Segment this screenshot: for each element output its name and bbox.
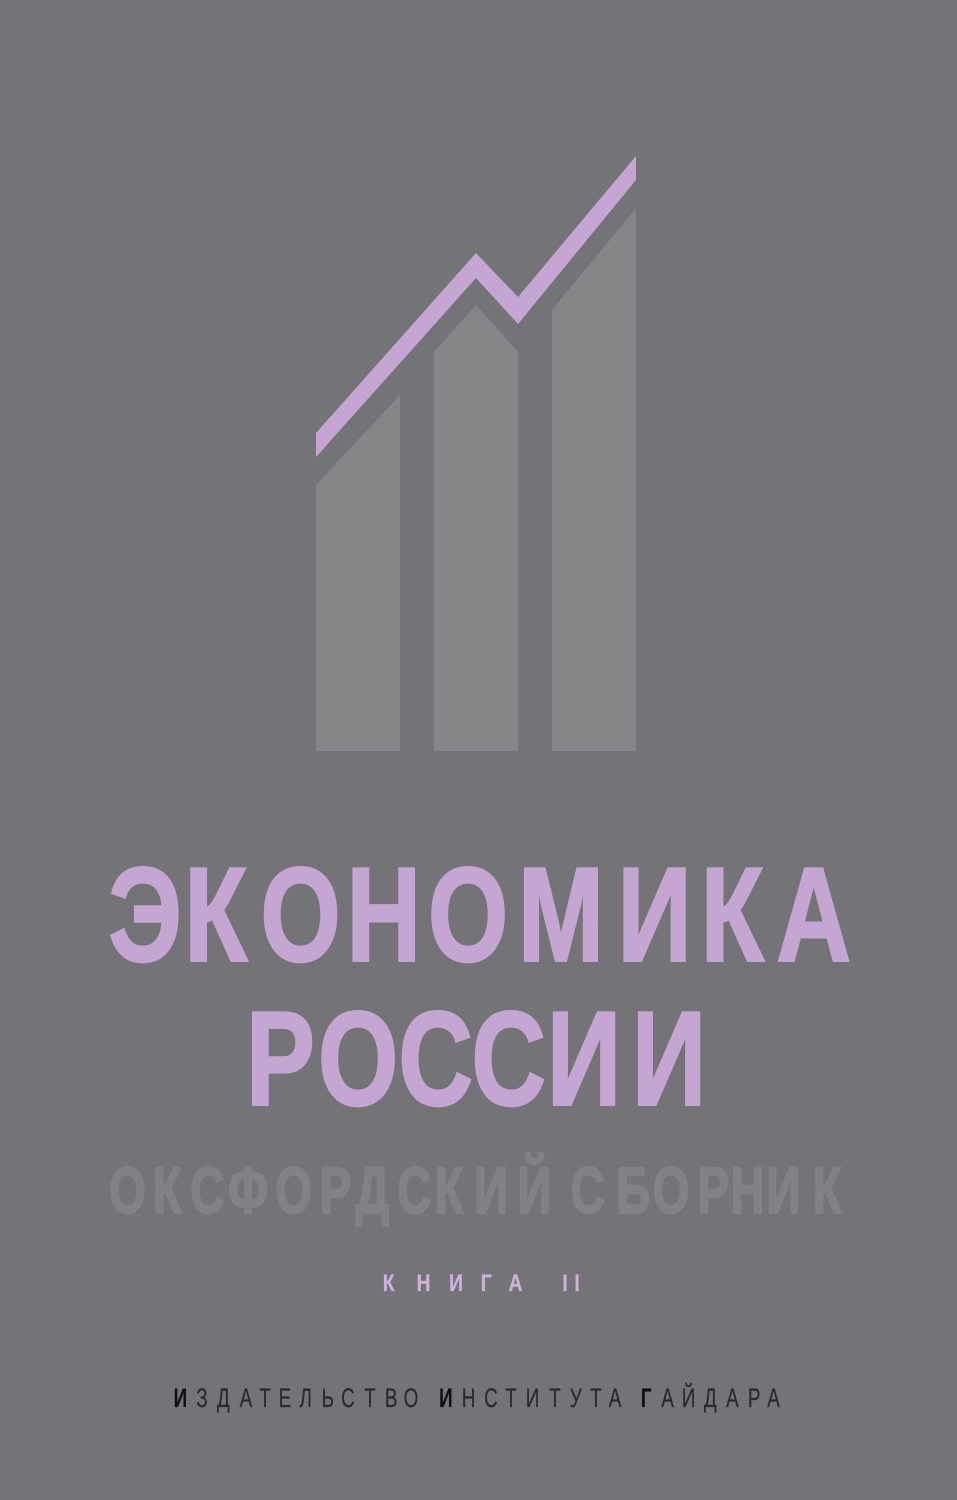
publisher: И ЗДАТЕЛЬСТВО И НСТИТУТА Г АЙДАРА	[174, 1382, 780, 1413]
title line 2: РОССИИ	[246, 985, 706, 1134]
bar 3	[552, 208, 636, 751]
chart icon: bars with rising line	[316, 156, 636, 751]
rising line	[316, 156, 636, 457]
volume label: КНИГА II	[383, 1269, 580, 1297]
bar 1	[316, 395, 400, 751]
subtitle: ОКСФОРДСКИЙ СБОРНИК	[109, 1153, 842, 1228]
bar 2	[434, 305, 518, 751]
title line 1: ЭКОНОМИКА	[108, 841, 851, 990]
